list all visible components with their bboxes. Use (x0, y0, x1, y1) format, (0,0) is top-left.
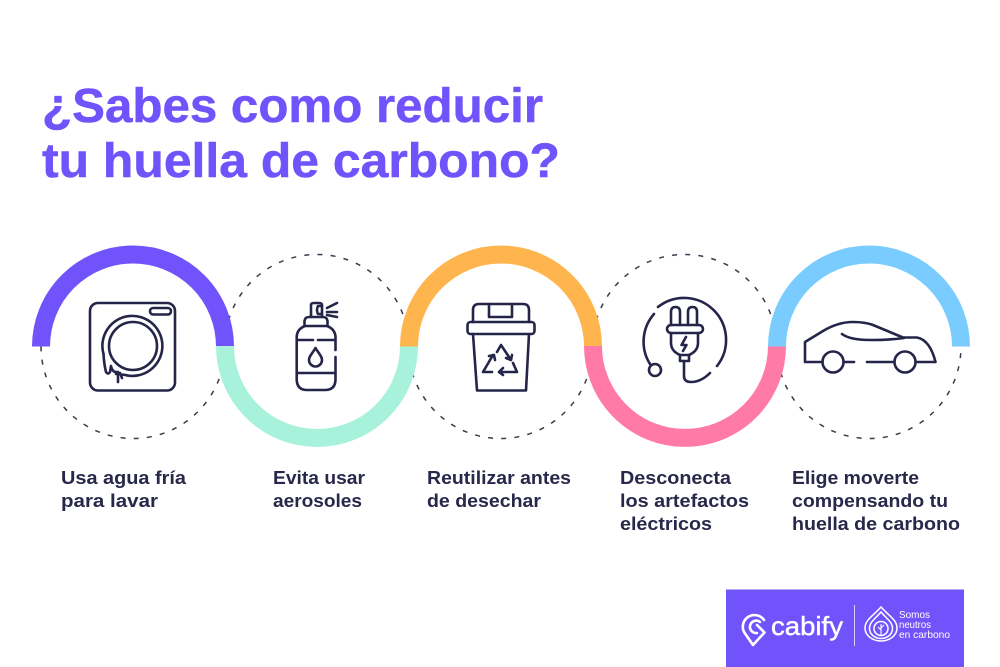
icon: recycling bin (468, 304, 534, 390)
label: wash cold (61, 467, 187, 511)
label: carbon offset: compensando tu (792, 490, 948, 511)
arc: teal (225, 346, 409, 438)
wave: coloured arcs (41, 255, 961, 438)
label: unplug: eléctricos (620, 513, 712, 534)
label: carbon offset (792, 467, 960, 534)
label: wash cold: para lavar (61, 490, 158, 511)
label: unplug (620, 467, 749, 534)
icon: washing machine (90, 303, 175, 390)
arc: purple (41, 255, 225, 346)
divider (854, 605, 855, 646)
label: carbon offset: huella de carbono (792, 513, 960, 534)
label: avoid aerosols: aerosoles (273, 490, 362, 511)
label: avoid aerosols: Evita usar (273, 467, 365, 488)
icon: cabify pin (743, 615, 764, 645)
label: wash cold: Usa agua fría (61, 467, 187, 488)
label: reuse (427, 467, 571, 511)
text: carbon neutral (899, 609, 950, 641)
label: carbon offset: Elige moverte (792, 467, 919, 488)
title: tu huella de carbono? (42, 135, 560, 188)
title: ¿Sabes como reducir (42, 80, 543, 133)
text: carbon neutral: en carbono (899, 629, 950, 641)
label: avoid aerosols (273, 467, 365, 511)
arc: light blue (777, 255, 961, 346)
label: unplug: Desconecta (620, 467, 732, 488)
logo panel: cabify (726, 590, 964, 667)
icon: aerosol spray can (297, 303, 337, 390)
label: unplug: los artefactos (620, 490, 749, 511)
label: reuse: Reutilizar antes (427, 467, 571, 488)
arc: orange (409, 255, 593, 346)
icon: carbon neutral drop (865, 607, 897, 641)
title (42, 80, 560, 188)
icon: car (805, 322, 936, 372)
text: carbon neutral: neutros (899, 619, 931, 631)
label: reuse: de desechar (427, 490, 541, 511)
text: carbon neutral: Somos (899, 609, 930, 621)
dashed circle outlines (41, 255, 961, 438)
arc: pink (593, 346, 777, 438)
icon: electric plug (644, 298, 726, 382)
wordmark: cabify (771, 611, 843, 641)
